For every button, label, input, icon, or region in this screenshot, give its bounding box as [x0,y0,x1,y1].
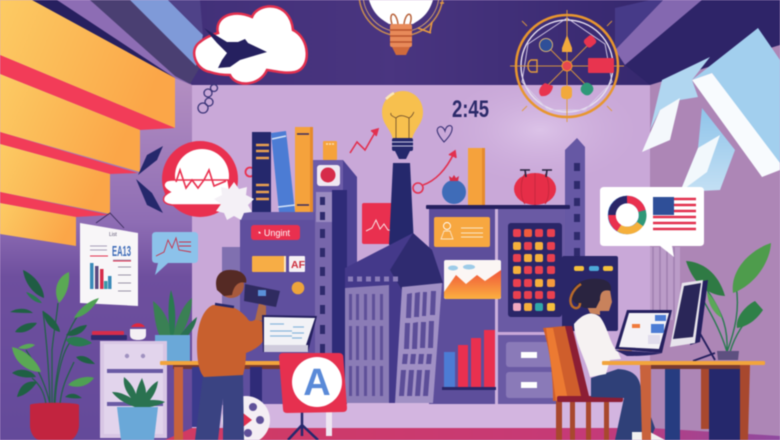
right laptop [615,310,672,356]
dark dot panel [508,223,562,317]
cloud with bird [194,6,307,84]
sweater [197,305,265,377]
red icon tile [317,165,340,186]
man [195,270,280,440]
hand [255,303,266,321]
top light bulb [359,0,444,55]
AF tile: AF [291,259,306,271]
neck and face [584,300,600,315]
monitor [670,280,715,361]
donut chart [612,199,643,230]
chain [198,84,218,113]
gold coin [292,282,304,294]
A sign [279,353,347,440]
film reel [222,396,270,440]
chair [543,326,623,440]
pulse cloud badge [162,141,254,217]
shelf [426,205,570,209]
red wave panel [362,203,398,244]
AF tile [289,256,306,272]
right desk [602,361,765,440]
city buildings centre [345,233,443,403]
icon: bird [204,28,267,68]
poster: List [109,232,117,238]
big potted plant [10,270,99,440]
blue pomegranate [442,175,466,204]
city block right [429,207,570,404]
stack of books [91,331,127,340]
left desk [160,361,295,440]
left laptop [262,315,317,352]
drawers [506,342,556,398]
red tomato [514,170,556,205]
compass wheel [510,10,624,122]
ceiling [0,0,780,85]
cabinet [100,341,167,438]
hair [571,279,611,308]
yellow wall panels [0,0,175,246]
bar chart [442,330,496,390]
floor [165,428,780,440]
head [218,272,244,298]
arrow zigzag [350,129,378,153]
label pill [251,225,300,240]
front plant [112,377,165,440]
clock time: 2:45 [452,96,489,123]
A sign: A [303,362,331,404]
chimney and lightbulb [382,91,423,245]
shoes [632,432,665,440]
phone [244,284,280,307]
mountain chart card [444,260,501,299]
icon: heart [437,126,452,142]
books [242,127,314,220]
small bowl [130,323,146,340]
orange column [468,148,485,205]
gear [214,182,254,220]
hand [618,337,637,355]
left wall [0,40,192,440]
building tower back [222,160,357,405]
back plant [153,290,197,361]
dark side tower [562,256,618,331]
orange bar [252,256,286,272]
navy diamonds [136,146,163,213]
blue chat bubble [152,232,198,275]
ribbed radiator [650,247,680,320]
speech bubble with donut and flag [600,187,704,257]
trousers [195,375,244,440]
trousers [591,369,655,440]
baseboard [192,403,650,429]
right wall [650,45,780,440]
tall tower [565,138,585,262]
label pill: ◔ Ungint [256,228,290,238]
arrow growth [413,151,456,193]
woman [570,279,665,440]
poster: EA13 [112,243,131,260]
right plant [686,243,771,360]
flag [653,197,696,232]
small orange box [323,141,337,160]
left ceiling beams [32,0,203,85]
light blue shards [642,28,780,192]
orange id card [434,217,490,247]
shirt [574,313,621,377]
poster [80,213,138,306]
